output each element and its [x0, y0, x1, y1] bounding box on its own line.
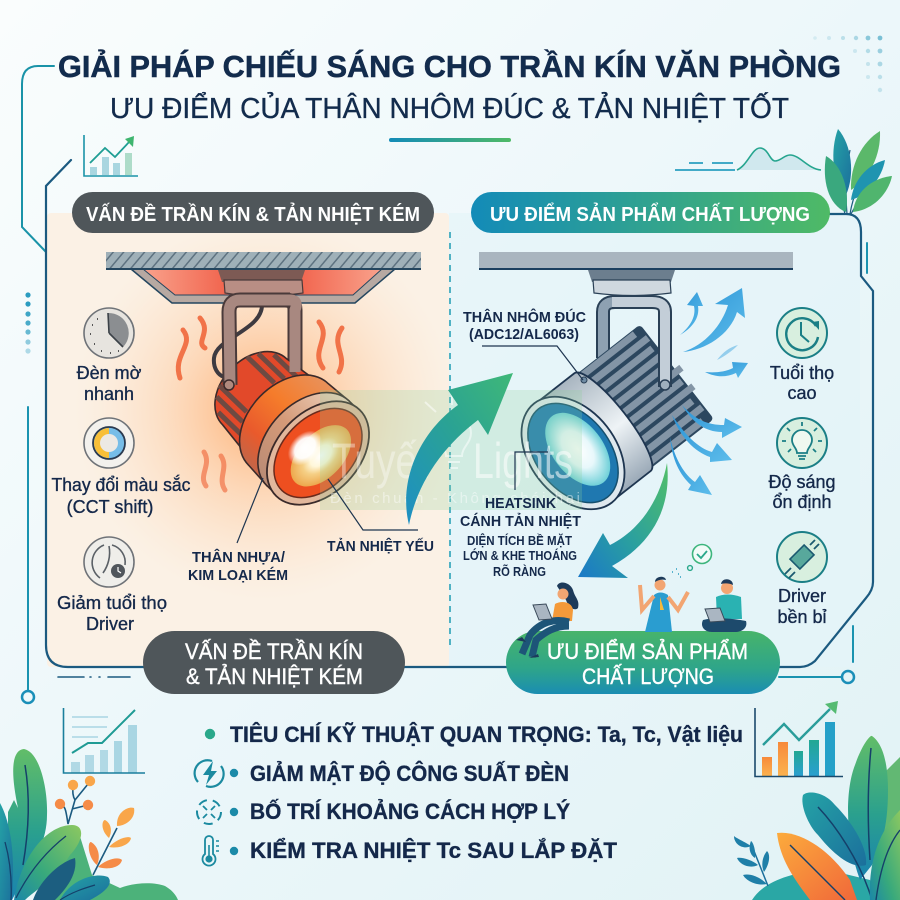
arrow: green curved down [578, 463, 668, 578]
text: fades quickly: nhanh [84, 384, 134, 404]
text: durable driver: bền bỉ [777, 607, 827, 627]
ceiling and recess: problem [106, 252, 421, 303]
front bracket arm [229, 300, 290, 385]
watermark: Tuyết [332, 433, 428, 489]
chart: right rising bars [755, 701, 843, 776]
label: poor cooling [327, 479, 434, 555]
chart: left line and bars [64, 708, 145, 773]
label: die-cast aluminium: (ADC12/AL6063) [469, 326, 579, 343]
dashed panel divider [449, 232, 451, 650]
label: heatsink: RÕ RÀNG [493, 564, 546, 579]
watermark: Lights [473, 433, 573, 489]
icon: small chart top left [84, 135, 138, 176]
decorative dots top right [813, 36, 882, 92]
bullet 2: GIẢM MẬT ĐỘ CÔNG SUẤT ĐÈN [250, 761, 569, 786]
seated man with laptop [702, 579, 746, 632]
callout pill: problem [143, 631, 405, 694]
people with laptops [516, 544, 746, 658]
label: heatsink [460, 452, 581, 579]
text: driver life [57, 593, 167, 634]
label: plastic body [188, 478, 288, 584]
frame lines [22, 66, 873, 703]
bullet 4: KIỂM TRA NHIỆT Tc SAU LẮP ĐẶT [250, 838, 618, 863]
label: die-cast aluminium: THÂN NHÔM ĐÚC [463, 308, 586, 326]
text: stable brightness [768, 472, 836, 512]
lamp: aluminium heatsink body [500, 302, 721, 529]
text: colour shift: (CCT shift) [67, 497, 153, 517]
callout pill: problem: & TẢN NHIỆT KÉM [186, 664, 363, 689]
icon: durable driver [777, 532, 827, 582]
label: plastic body: KIM LOẠI KÉM [188, 567, 288, 584]
heading pill: problem: VẤN ĐỀ TRẦN KÍN & TẢN NHIỆT KÉM [86, 202, 420, 226]
bullet list [195, 722, 743, 866]
callout pill: benefits [506, 631, 780, 694]
ceiling: benefits [479, 252, 793, 270]
text: durable driver: Driver [778, 586, 826, 606]
text: fades quickly [77, 363, 142, 404]
text: colour shift: Thay đổi màu sắc [52, 474, 190, 495]
label: plastic body: THÂN NHỰA/ [192, 548, 286, 566]
light highlight [281, 424, 329, 472]
icon: plant top right [825, 129, 892, 214]
label: poor cooling: TẢN NHIỆT YẾU [327, 537, 434, 555]
check bubble [672, 544, 712, 577]
text: long life [770, 363, 834, 403]
text: stable brightness: ổn định [772, 492, 832, 512]
plants bottom right [734, 736, 900, 900]
bullet 1: TIÊU CHÍ KỸ THUẬT QUAN TRỌNG: Ta, Tc, Vật liệu [230, 722, 743, 747]
title divider [389, 138, 511, 142]
icon: long life clock [777, 308, 827, 358]
text: long life: Tuổi thọ [770, 363, 834, 383]
text: colour shift [52, 474, 190, 517]
text: durable driver [777, 586, 827, 627]
icon: dimming clock [84, 308, 134, 358]
arrow: green curved up [406, 373, 513, 525]
icon: driver life [84, 537, 134, 587]
standing man [640, 577, 688, 632]
title: GIẢI PHÁP CHIẾU SÁNG CHO TRẦN KÍN VĂN PHÒNG [58, 48, 841, 84]
decorative dots left [25, 292, 31, 354]
panel: problem background [47, 213, 449, 667]
heading pill: benefits [471, 192, 830, 233]
woman with laptop [516, 583, 578, 658]
plants bottom left [0, 749, 178, 900]
label: heatsink: CÁNH TẢN NHIỆT [460, 512, 581, 530]
lamp: hot plastic body [189, 300, 389, 525]
text: fades quickly: Đèn mờ [77, 363, 142, 383]
text: driver life: Giảm tuổi thọ [57, 593, 167, 613]
text: stable brightness: Độ sáng [768, 472, 836, 492]
callout pill: problem: VẤN ĐỀ TRẦN KÍN [185, 639, 363, 664]
icon: wave line top right [675, 148, 821, 170]
cable [214, 305, 262, 377]
airflow arrows [670, 288, 748, 495]
watermark [320, 390, 582, 510]
heat waves [178, 318, 342, 490]
rear bracket arm [603, 302, 615, 358]
text: driver life: Driver [86, 614, 134, 634]
icon: colour shift [84, 418, 134, 468]
front bracket arm [612, 302, 665, 387]
callout pill: benefits: CHẤT LƯỢNG [582, 664, 714, 689]
label: die-cast aluminium [463, 308, 586, 380]
panel: benefits background [449, 213, 860, 667]
ceiling mount: problem [218, 270, 305, 296]
ceiling mount: benefits [588, 270, 675, 296]
callout pill: benefits: ƯU ĐIỂM SẢN PHẨM [547, 639, 748, 664]
watermark: Đèn chuẩn - Không chói hại [330, 490, 580, 507]
rear bracket arm [285, 300, 295, 372]
label: heatsink: HEATSINK [485, 495, 556, 512]
heading pill: benefits: ƯU ĐIỂM SẢN PHẨM CHẤT LƯỢNG [490, 203, 810, 226]
text: long life: cao [787, 383, 817, 403]
icon: stable brightness [777, 418, 827, 468]
heading pill: problem [72, 192, 434, 233]
subtitle: ƯU ĐIỂM CỦA THÂN NHÔM ĐÚC & TẢN NHIỆT TỐT [110, 91, 789, 125]
bullet 3: BỐ TRÍ KHOẢNG CÁCH HỢP LÝ [250, 798, 570, 824]
label: heatsink: DIỆN TÍCH BỀ MẶT [467, 533, 572, 548]
label: heatsink: LỚN & KHE THOÁNG [463, 548, 577, 563]
